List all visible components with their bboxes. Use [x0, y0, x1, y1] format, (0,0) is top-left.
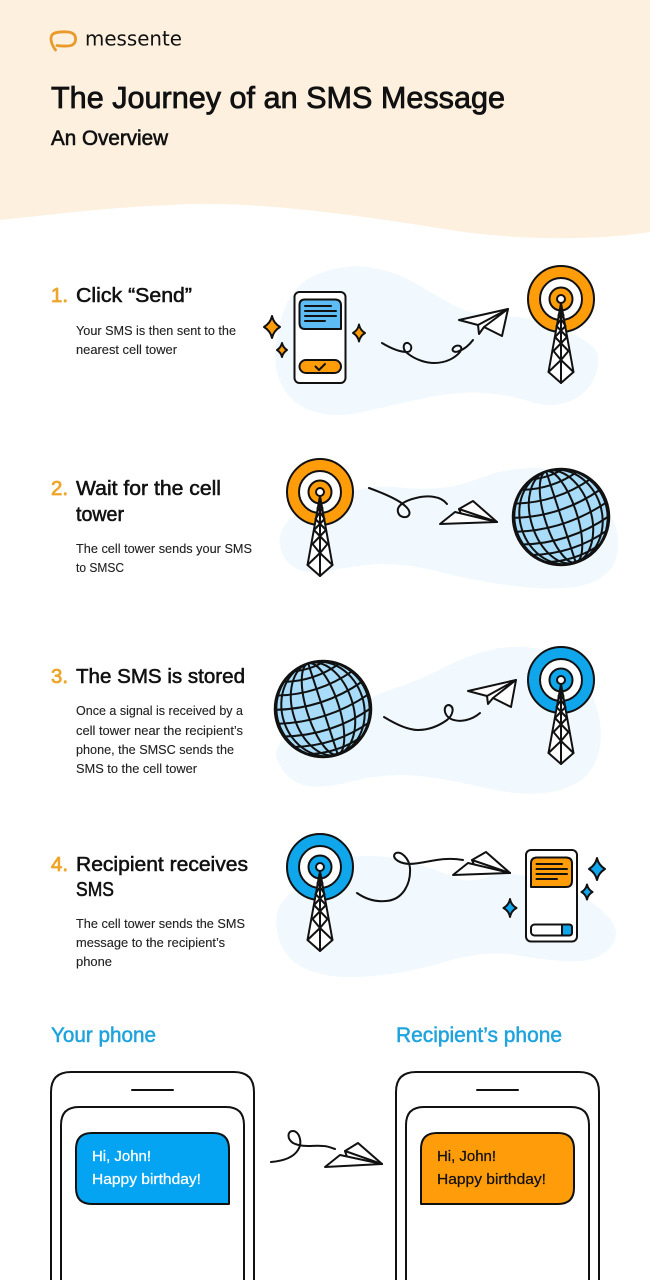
phone speaker	[132, 1089, 173, 1091]
phone screen	[61, 1107, 244, 1280]
step 4 description: message to the recipient’s	[76, 935, 225, 950]
your phone mockup	[51, 1072, 254, 1280]
icon: globe	[501, 457, 621, 577]
background blob	[276, 856, 616, 977]
header background wave	[0, 0, 650, 238]
icon: paper plane	[459, 309, 508, 336]
step 4 description: The cell tower sends the SMS	[76, 916, 245, 931]
blue message bubble	[76, 1133, 229, 1204]
icon: sparkles	[504, 858, 605, 917]
step 1 description: Your SMS is then sent to the	[76, 323, 236, 338]
step 2 heading	[76, 477, 221, 526]
step 2 description	[76, 541, 252, 575]
label: your phone: Your phone	[51, 1024, 156, 1047]
background blob	[276, 647, 601, 794]
icon: globe	[263, 649, 383, 769]
phone speaker	[477, 1089, 518, 1091]
step 3 description: SMS to the cell tower	[76, 761, 198, 776]
icon: paper plane	[468, 680, 516, 707]
title: The Journey of an SMS Message	[51, 80, 505, 115]
blue message bubble: Hi, John!	[92, 1148, 151, 1165]
flight path	[369, 488, 447, 517]
step 2 description: The cell tower sends your SMS	[76, 541, 252, 556]
step 3 heading: The SMS is stored	[76, 665, 245, 688]
step 4 heading: Recipient receives	[76, 853, 248, 876]
step 1 description	[76, 323, 236, 357]
step 3 description: phone, the SMSC sends the	[76, 742, 234, 757]
flight path	[357, 853, 463, 901]
icon: paper plane	[440, 501, 497, 524]
step 3 description: Once a signal is received by a	[76, 703, 244, 718]
step 4 text	[51, 853, 248, 969]
flight path	[382, 340, 473, 363]
recipient phone mockup	[396, 1072, 599, 1280]
step 4 description: phone	[76, 954, 112, 969]
step 4 heading: SMS	[76, 878, 114, 901]
logo	[51, 26, 182, 50]
background blob	[279, 468, 618, 589]
step number 2: 2.	[51, 477, 68, 500]
icon: blue cell tower	[528, 647, 594, 764]
step 2 heading: Wait for the cell	[76, 477, 221, 500]
step 2 heading: tower	[76, 503, 124, 526]
icon: orange cell tower	[287, 459, 353, 576]
icon: orange cell tower	[528, 266, 594, 383]
step 4 heading	[76, 853, 248, 901]
phone screen	[406, 1107, 589, 1280]
step number 1: 1.	[51, 284, 68, 307]
icon: sparkles	[264, 316, 365, 357]
step 4 illustration	[276, 834, 616, 977]
step 1 heading: Click “Send”	[76, 284, 192, 307]
orange message bubble	[421, 1133, 574, 1204]
step number 3: 3.	[51, 665, 68, 688]
background blob	[275, 266, 598, 415]
step 1 illustration	[264, 266, 598, 415]
step 3 description	[76, 703, 244, 776]
phone body	[51, 1072, 254, 1280]
icon: paper plane	[453, 852, 510, 875]
subtitle: An Overview	[51, 127, 169, 150]
orange message bubble: Happy birthday!	[437, 1171, 546, 1188]
step number 4: 4.	[51, 853, 68, 876]
step 2 illustration	[279, 457, 621, 589]
step 2 text	[51, 477, 252, 575]
phone body	[396, 1072, 599, 1280]
step 3 description: cell tower near the recipient’s	[76, 723, 243, 738]
blue message bubble: Happy birthday!	[92, 1171, 201, 1188]
orange message bubble: Hi, John!	[437, 1148, 496, 1165]
icon: logo speech bubble	[51, 32, 76, 50]
step 1 text	[51, 284, 236, 357]
icon: recipient phone	[526, 850, 577, 942]
label: recipient's phone: Recipient’s phone	[396, 1024, 562, 1047]
step 2 description: to SMSC	[76, 560, 124, 575]
flight path	[384, 705, 480, 730]
icon: paper plane	[325, 1143, 382, 1167]
flight path to recipient	[271, 1131, 335, 1162]
logo wordmark: messente	[85, 26, 182, 50]
icon: blue cell tower	[287, 834, 353, 951]
step 1 description: nearest cell tower	[76, 342, 178, 357]
step 3 text	[51, 665, 245, 776]
step 4 description	[76, 916, 245, 969]
icon: sender phone	[294, 292, 346, 383]
step 3 illustration	[263, 647, 601, 794]
